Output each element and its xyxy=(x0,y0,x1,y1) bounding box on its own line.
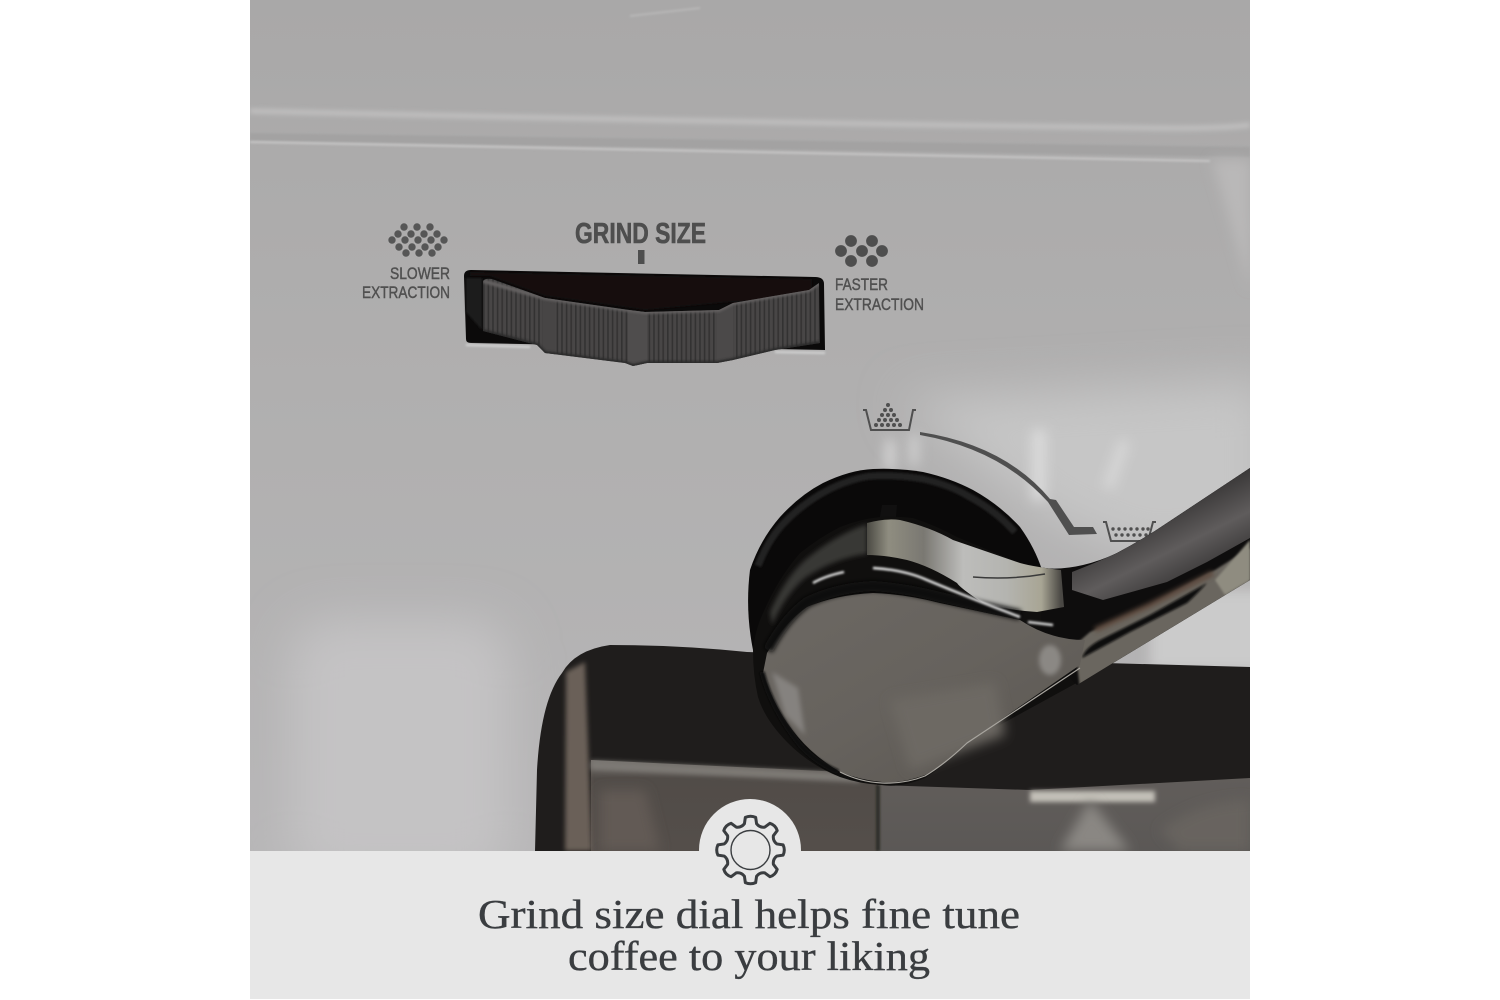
neck dark crease xyxy=(973,574,1045,578)
tray xyxy=(535,645,1250,851)
brew lever handle xyxy=(753,460,1260,786)
photo: coffee maker front panel xyxy=(250,0,1270,880)
lever silhouette xyxy=(753,468,1250,786)
lever neck reflection xyxy=(867,519,1064,612)
dark inner bowl edge xyxy=(762,672,838,772)
arc scale arrow xyxy=(920,432,1097,535)
label: grind size: GRIND SIZE xyxy=(575,218,706,250)
tray left edge xyxy=(565,662,592,851)
label: slower extraction: SLOWER xyxy=(390,264,450,283)
bowl soft reflections xyxy=(903,690,1010,768)
collar pointer mark xyxy=(878,505,897,528)
dial slot xyxy=(464,270,825,350)
infographic: grind size dial photo with caption xyxy=(250,0,1250,999)
soft reflections on panel xyxy=(290,380,1270,880)
tray lower front xyxy=(591,760,878,851)
lever arm xyxy=(1046,468,1250,685)
chrome shoulder reflection xyxy=(770,524,867,625)
top ledge with highlights xyxy=(250,8,1250,248)
icon: fine grind dots xyxy=(388,223,448,257)
dial ribbed body xyxy=(483,278,820,366)
dial facets xyxy=(543,297,555,354)
icon badge xyxy=(699,799,801,901)
brew lever collar xyxy=(748,469,1042,650)
caption text: Grind size dial helps fine tune xyxy=(478,891,1020,937)
label: grind size xyxy=(576,222,706,264)
caption text: coffee to your liking xyxy=(568,933,930,979)
icon: coarse grind dots xyxy=(835,235,888,267)
caption text xyxy=(478,891,1020,979)
bowl face xyxy=(763,593,1085,782)
label: slower extraction xyxy=(362,267,450,298)
machine body background xyxy=(250,0,1250,851)
icon: large basin xyxy=(863,403,916,430)
label: faster extraction: EXTRACTION xyxy=(835,295,924,314)
label: slower extraction: EXTRACTION xyxy=(362,283,450,302)
grind size dial xyxy=(464,270,825,372)
icon: gear xyxy=(717,816,784,884)
label: faster extraction xyxy=(836,278,923,310)
chrome highlights xyxy=(873,568,1020,617)
label: faster extraction: FASTER xyxy=(835,275,888,294)
icon: small basin xyxy=(1103,522,1156,541)
caption panel xyxy=(250,851,1250,999)
